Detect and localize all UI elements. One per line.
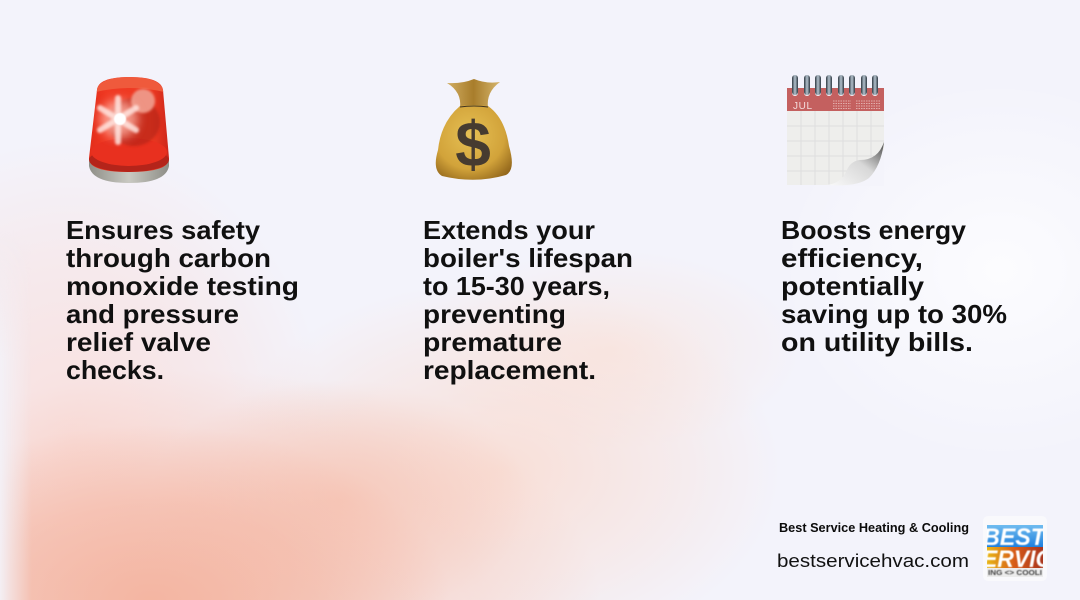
icon: money bag: $: [455, 108, 491, 180]
text: safety benefit: [66, 215, 299, 385]
text: energy efficiency benefit: potentially: [781, 271, 925, 301]
text: lifespan benefit: preventing: [423, 299, 566, 329]
text: energy efficiency benefit: saving up to 30%: [781, 299, 1007, 329]
text: lifespan benefit: premature: [423, 327, 562, 357]
text: safety benefit: monoxide testing: [66, 271, 299, 301]
company name: Best Service Heating & Cooling: [779, 521, 969, 535]
text: lifespan benefit: to 15-30 years,: [423, 271, 610, 301]
text: lifespan benefit: Extends your: [423, 215, 595, 245]
text: lifespan benefit: [423, 215, 633, 385]
website url: bestservicehvac.com: [777, 551, 969, 571]
text: lifespan benefit: replacement.: [423, 355, 596, 385]
logo: [987, 525, 1043, 577]
logo: ERVIC: [982, 546, 1053, 573]
text: energy efficiency benefit: on utility bills.: [781, 327, 973, 357]
text: safety benefit: checks.: [66, 355, 164, 385]
logo: ING <> COOLI: [988, 570, 1042, 577]
icon: red siren light: [86, 75, 172, 183]
text: safety benefit: and pressure: [66, 299, 239, 329]
text: energy efficiency benefit: Boosts energy: [781, 215, 967, 245]
logo: BEST: [983, 524, 1047, 551]
text: energy efficiency benefit: efficiency,: [781, 243, 923, 273]
icon: calendar: [787, 75, 884, 186]
text: energy efficiency benefit: [781, 215, 1007, 357]
text: safety benefit: relief valve: [66, 327, 211, 357]
icon: money bag: [436, 79, 512, 180]
text: lifespan benefit: boiler's lifespan: [423, 243, 633, 273]
text: safety benefit: Ensures safety: [66, 215, 261, 245]
icon: calendar: JUL: [793, 101, 812, 112]
text: safety benefit: through carbon: [66, 243, 271, 273]
